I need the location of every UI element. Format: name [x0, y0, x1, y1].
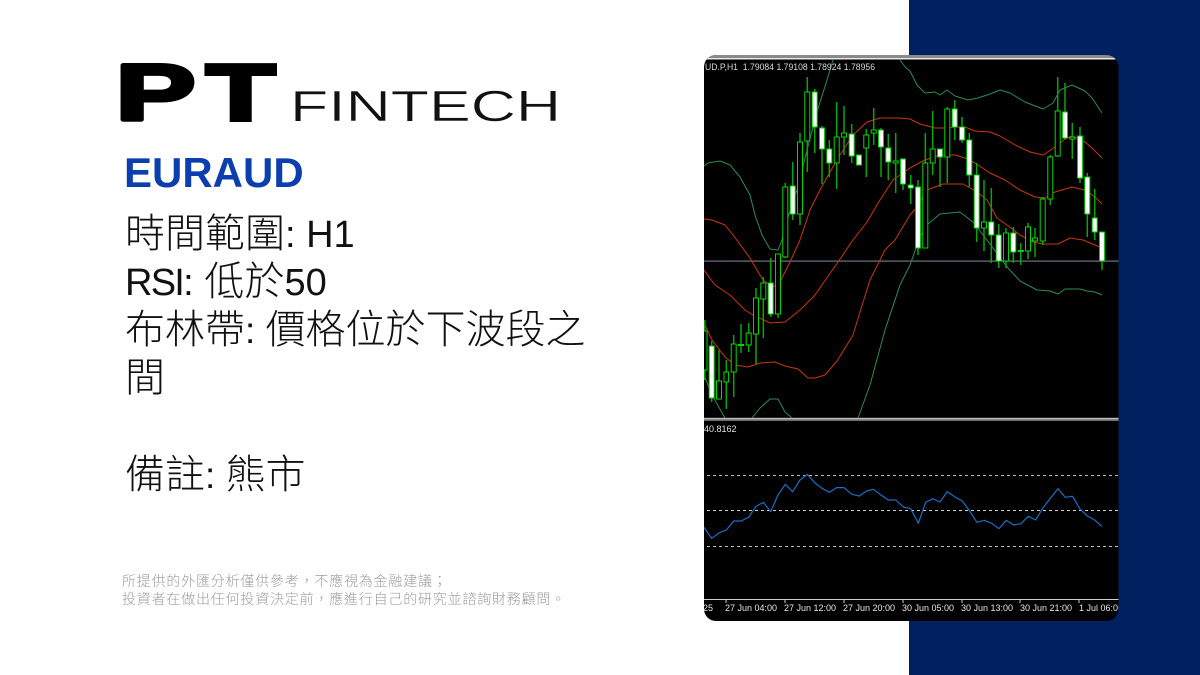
time axis labels: 27 Jun 20:00: [843, 603, 895, 613]
navy side panel: [909, 0, 1200, 675]
RSI level lines: [707, 476, 1118, 546]
time axis labels: 27 Jun 04:00: [725, 603, 777, 613]
chart: candlestick with Bollinger bands and RSI: [704, 55, 1118, 621]
time axis labels: [704, 604, 1118, 611]
heading: pair name: EURAUD: [124, 149, 304, 196]
lower outer band: [704, 375, 725, 418]
candle wicks: [705, 77, 1102, 409]
middle band: [704, 155, 1102, 323]
time axis labels: 30 Jun 05:00: [902, 603, 954, 613]
upper outer band right part: [900, 60, 1102, 113]
Bollinger bands: [704, 60, 1102, 418]
logo: PT FINTECH: [116, 55, 561, 127]
disclaimer: 投資者在做出任何投資決定前，應進行自己的研究並諮詢財務顧問。: [122, 591, 566, 607]
lower outer band right part: [858, 212, 1102, 418]
upper inner band: [704, 118, 1102, 287]
RSI line: RSI: 低於50: [125, 260, 327, 304]
text block: analysis details: [125, 212, 586, 497]
Bollinger line: 布林帶: 價格位於下波段之: [125, 308, 586, 352]
hollow candle bodies: [702, 92, 1075, 399]
time axis: [704, 599, 1118, 611]
time axis labels: 27 Jun 12:00: [784, 603, 836, 613]
note line: 備註: 熊市: [125, 453, 306, 497]
time axis labels: 30 Jun 21:00: [1020, 603, 1072, 613]
lower inner band: [704, 184, 1100, 378]
disclaimer: [122, 573, 566, 607]
disclaimer: 所提供的外匯分析僅供參考，不應視為金融建議；: [122, 573, 448, 589]
time axis labels: 30 Jun 13:00: [961, 603, 1013, 613]
white candle bodies: [709, 92, 1104, 398]
upper outer band: [704, 60, 833, 250]
Bollinger line continued: 間: [125, 356, 165, 400]
RSI line: [704, 474, 1102, 538]
chart price header: UD.P,H1 1.79084 1.79108 1.78924 1.78956: [705, 62, 875, 72]
RSI value: 40.8162: [704, 424, 737, 434]
timeframe line: 時間範圍: H1: [125, 212, 355, 256]
lower outer band middle part: [752, 399, 792, 418]
